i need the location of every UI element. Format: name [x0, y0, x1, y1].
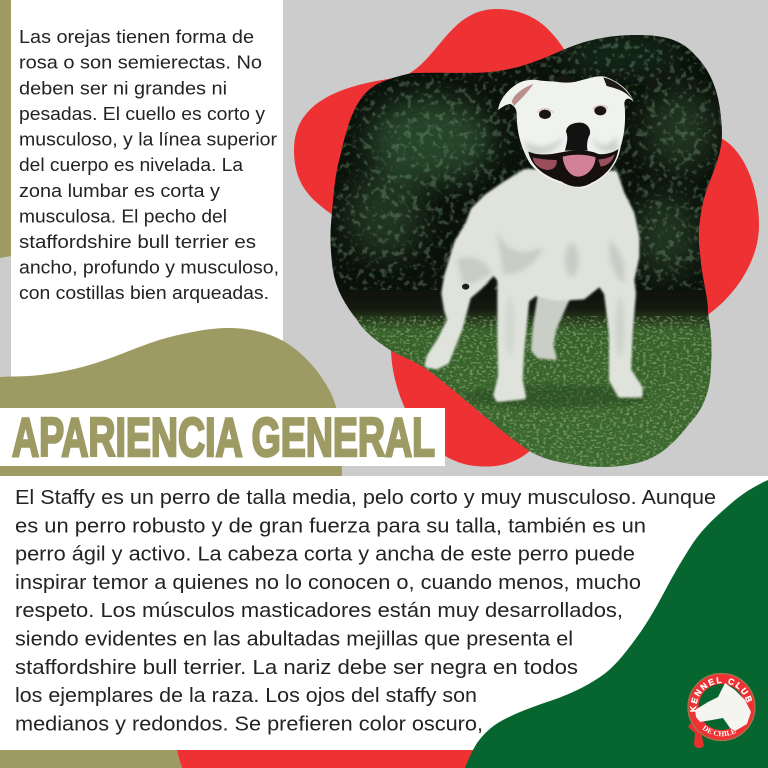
dog shadow on grass [463, 385, 650, 408]
bottom text block: respeto. Los músculos masticadores están muy desarrollados, [15, 599, 623, 622]
bottom text block: El Staffy es un perro de talla media, pelo corto y muy musculoso. Aunque [15, 486, 716, 509]
logo: Kennel Club de Chile [687, 672, 756, 748]
eye pink rims [537, 105, 608, 113]
top text block: musculosa. El pecho del [19, 205, 227, 226]
top text block: staffordshire bull terrier es [19, 231, 256, 252]
hip spot [462, 284, 469, 290]
bottom text block: inspirar temor a quienes no lo conocen o, cuando menos, mucho [15, 571, 641, 594]
muzzle shading [523, 137, 618, 157]
body muscle shading [457, 230, 625, 357]
right ear dark patch [603, 77, 633, 100]
olive side strip [0, 0, 11, 258]
logo bottom text: DE CHILE [702, 725, 736, 736]
top text block: musculoso, y la línea superior [19, 129, 277, 150]
bottom text block: es un perro robusto y de gran fuerza para su talla, también es un [15, 514, 646, 537]
photo: dark foliage [325, 30, 730, 315]
body and legs [427, 172, 640, 399]
title background [0, 408, 445, 466]
tongue [563, 155, 596, 177]
grey background [0, 0, 768, 476]
far hind leg [533, 295, 568, 358]
mouth [528, 149, 618, 187]
top text block: pesadas. El cuello es corto y [19, 103, 266, 124]
left ear inner [512, 84, 533, 106]
photo: grass texture [356, 316, 712, 467]
nose [565, 123, 590, 151]
logo dog head [695, 683, 751, 731]
bottom text block: siendo evidentes en las abultadas mejillas que presenta el [15, 628, 573, 650]
head tuft [553, 75, 577, 83]
top text block: rosa o son semierectas. No [19, 52, 262, 73]
photo: lawn [338, 290, 712, 467]
top text block: con costillas bien arqueadas. [19, 282, 269, 303]
bottom text block [15, 486, 716, 735]
bottom text block: perro ágil y activo. La cabeza corta y ancha de este perro puede [15, 543, 635, 566]
logo inner circle [698, 684, 744, 730]
left eye [539, 110, 551, 119]
top text block: deben ser ni grandes ni [19, 77, 227, 98]
bottom strip: red [177, 750, 480, 768]
logo top text: KENNEL CLUB [690, 677, 752, 712]
title: APARIENCIA GENERAL [12, 406, 435, 468]
head [498, 76, 633, 188]
photo: foliage texture [325, 30, 730, 292]
title band [0, 406, 445, 468]
logo ring [688, 674, 755, 740]
bottom text block: staffordshire bull terrier. La nariz debe ser negra en todos [15, 656, 578, 679]
top text block: Las orejas tienen forma de [19, 26, 254, 47]
bottom text block: los ejemplares de la raza. Los ojos del staffy son [15, 684, 477, 707]
green wave [465, 480, 768, 768]
red blob behind photo [294, 9, 759, 467]
olive wave [0, 328, 342, 476]
photo: lighter foliage glow [347, 39, 715, 275]
top text block: ancho, profundo y musculoso, [19, 257, 279, 278]
top text block [19, 26, 279, 303]
dog photo [325, 30, 730, 475]
logo tassel [688, 722, 704, 748]
bottom text block: medianos y redondos. Se prefieren color oscuro, [15, 712, 483, 735]
right gums [598, 154, 615, 167]
top text block: del cuerpo es nivelada. La [19, 154, 244, 175]
top text block: zona lumbar es corta y [19, 180, 221, 201]
right eye [594, 106, 606, 115]
photo: dog [427, 75, 650, 408]
gums [533, 157, 557, 170]
panel: white text column [11, 0, 283, 385]
bottom strip: olive [0, 750, 182, 768]
